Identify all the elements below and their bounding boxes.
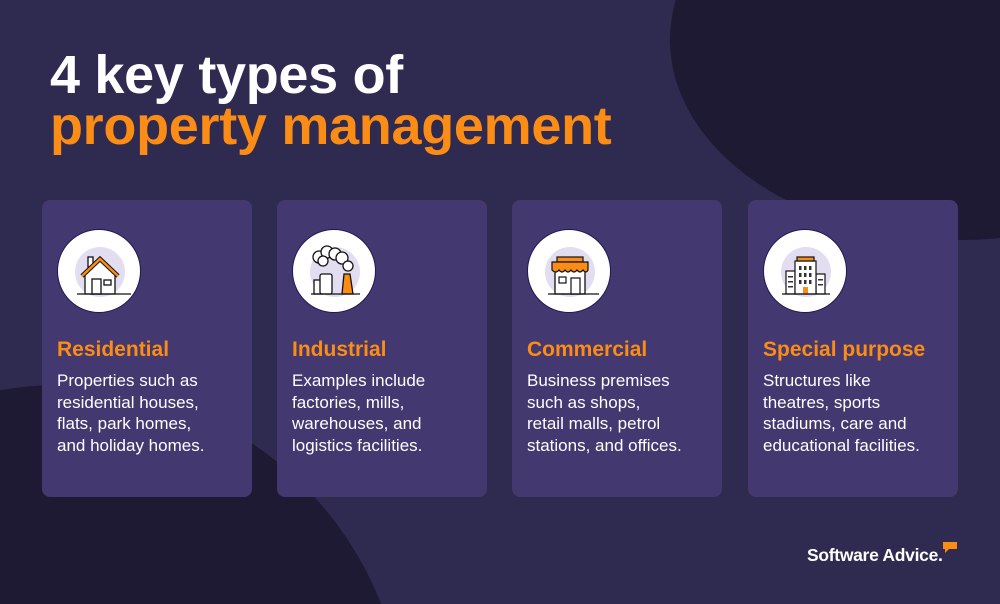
text: educational facilities. <box>763 436 920 454</box>
heading: Commercial <box>527 338 647 361</box>
text <box>57 371 204 454</box>
panel: special purpose <box>748 200 958 497</box>
text: and holiday homes. <box>57 436 204 454</box>
text: warehouses, and <box>292 414 421 433</box>
heading: Industrial <box>292 338 387 361</box>
title: property management <box>50 96 611 156</box>
icon: buildings <box>763 229 847 313</box>
text: Business premises <box>527 371 670 390</box>
logo: Software Advice. <box>807 545 943 565</box>
icon: shop <box>527 229 611 313</box>
panel: commercial <box>512 200 722 497</box>
text: flats, park homes, <box>57 414 191 433</box>
icon: house <box>57 229 141 313</box>
text <box>292 371 425 454</box>
title <box>50 45 612 156</box>
text: Examples include <box>292 371 425 390</box>
text: theatres, sports <box>763 392 880 412</box>
text <box>527 371 682 454</box>
text: retail malls, petrol <box>527 414 660 433</box>
heading: Residential <box>57 338 169 361</box>
title: 4 key types of <box>50 45 403 105</box>
text: stations, and offices. <box>527 436 682 454</box>
panel: industrial <box>277 200 487 497</box>
text: such as shops, <box>527 392 640 412</box>
heading: Special purpose <box>763 338 925 361</box>
text: residential houses, <box>57 392 199 412</box>
panel: residential <box>42 200 252 497</box>
text: stadiums, care and <box>763 414 907 433</box>
text: Structures like <box>763 371 871 390</box>
text <box>763 371 920 454</box>
text: factories, mills, <box>292 392 404 412</box>
text: Properties such as <box>57 371 198 390</box>
icon: factory <box>292 229 376 313</box>
text: logistics facilities. <box>292 436 422 454</box>
